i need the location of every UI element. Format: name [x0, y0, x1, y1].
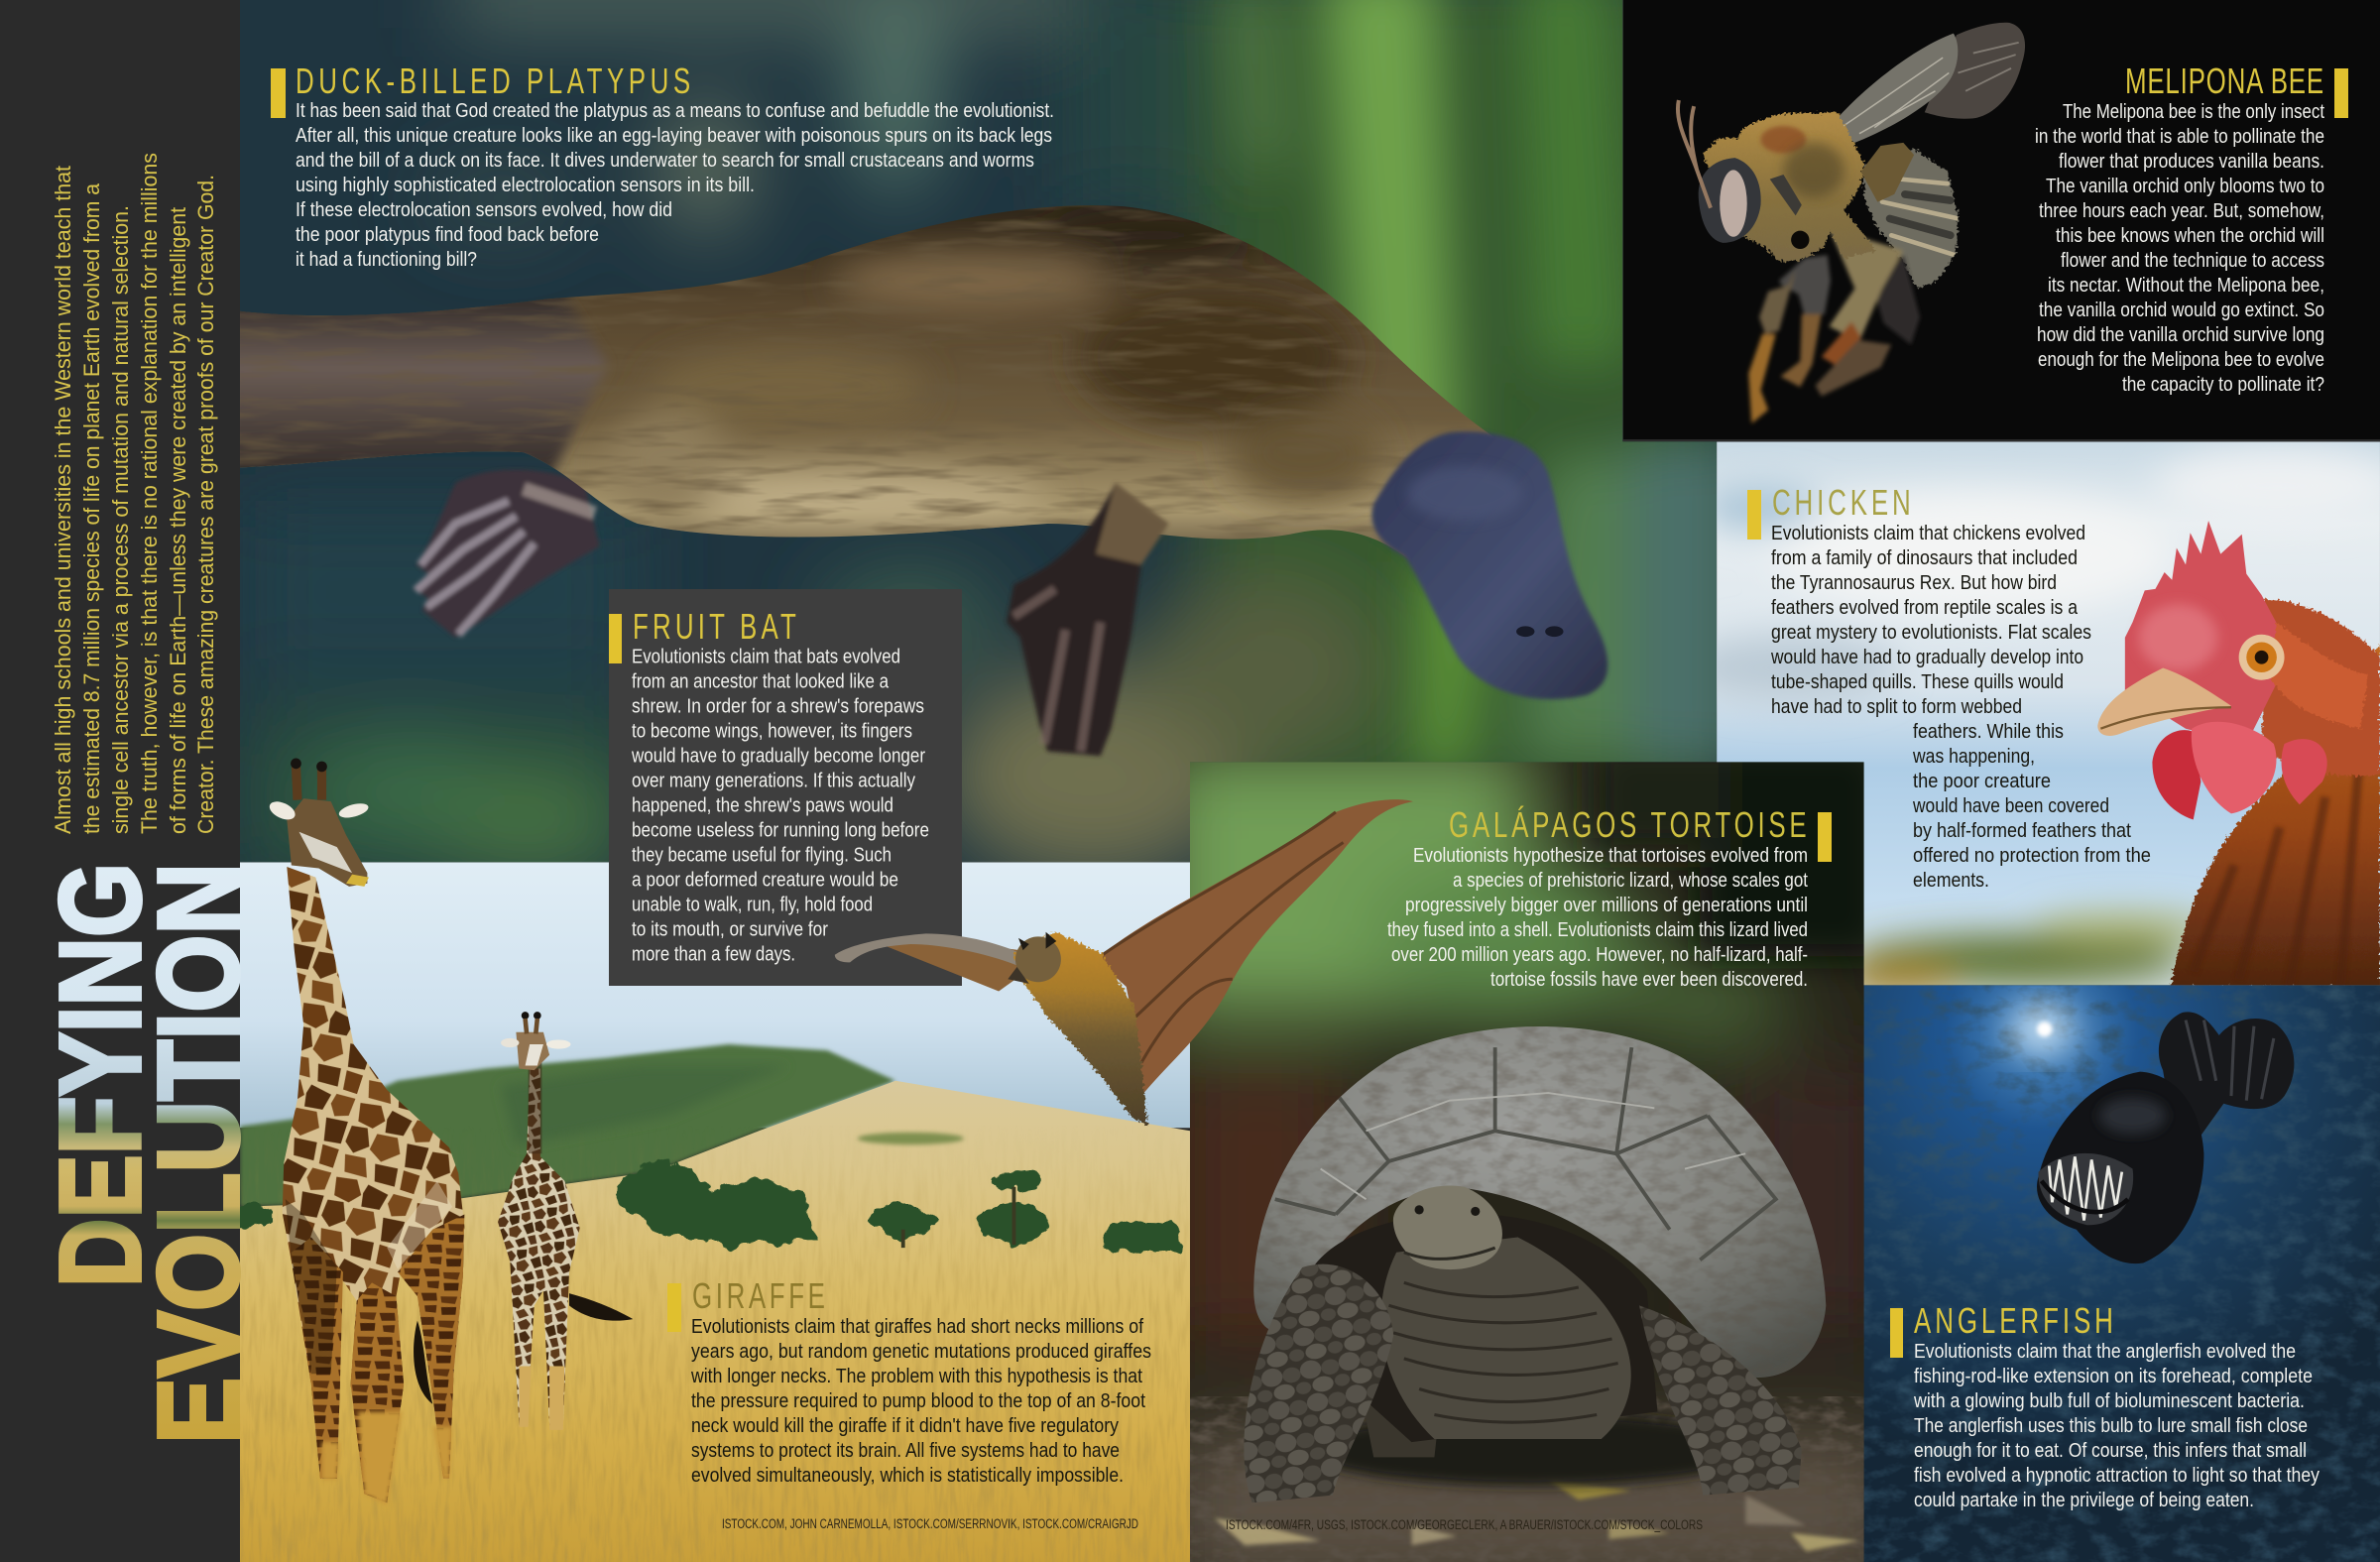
panel: anglerfish: [1864, 985, 2380, 1562]
text: fruit bat description: unable to walk, run, fly, hold food: [632, 893, 873, 916]
text: chicken description: feathers evolved from reptile scales is a: [1771, 596, 2079, 619]
heading: galapagos tortoise: [1449, 805, 1832, 862]
text: platypus description: After all, this unique creature looks like an egg-laying beaver with poisonous spurs on its back legs: [296, 124, 1052, 147]
text: fruit bat description: become useless for running long before: [632, 819, 929, 841]
text: sidebar introduction: single cell ancestor via a process of mutation and natural selection.: [108, 205, 133, 834]
heading: fruit bat: FRUIT BAT: [633, 607, 796, 647]
panel: fruit bat: [609, 589, 962, 986]
text: giraffe description: evolved simultaneously, which is statistically impossible.: [691, 1464, 1124, 1487]
text: platypus description: it had a functioning bill?: [296, 248, 477, 271]
text: bee description: the capacity to pollinate it?: [2122, 373, 2324, 396]
text: bee description: The vanilla orchid only blooms two to: [2046, 175, 2324, 197]
text: bee description: its nectar. Without the Melipona bee,: [2048, 274, 2324, 297]
text: chicken description: elements.: [1913, 869, 1989, 892]
front foot: [1007, 483, 1169, 756]
panel: giraffe: [209, 759, 1190, 1562]
panel: duck-billed platypus: [228, 0, 1738, 881]
text: tortoise description: a species of prehistoric lizard, whose scales got: [1453, 869, 1808, 892]
text: tortoise description: tortoise fossils have ever been discovered.: [1490, 968, 1808, 991]
bee legs: [1748, 228, 1920, 423]
text: bee description: flower and the technique to access: [2061, 249, 2324, 272]
deep sea background: [1864, 985, 2380, 1562]
text: tortoise description: Evolutionists hypothesize that tortoises evolved from: [1413, 844, 1808, 867]
text: giraffe description: years ago, but random genetic mutations produced giraffes: [691, 1340, 1151, 1363]
text: anglerfish description: fishing-rod-like extension on its forehead, complete: [1914, 1365, 2313, 1387]
heading: chicken: [1747, 483, 1911, 540]
heading: galapagos tortoise: GALÁPAGOS TORTOISE: [1449, 805, 1807, 845]
panel: chicken: [1685, 441, 2380, 995]
text: fruit bat description: over many generations. If this actually: [632, 770, 916, 791]
text: chicken description: the poor creature: [1913, 770, 2051, 792]
platypus photo background: [240, 0, 1738, 881]
photo credit: right: ISTOCK.COM/4FR, USGS, ISTOCK.COM/GEORGECLERK, A BRAUER/ISTOCK.COM/STOCK_COLORS: [1226, 1517, 1703, 1532]
text: sidebar introduction: Creator. These amazing creatures are great proofs of our Creator God.: [193, 175, 218, 834]
icon: tortoise: [1244, 1018, 1837, 1502]
text: platypus description: and the bill of a duck on its face. It dives underwater to search for small crustaceans and worms: [296, 149, 1034, 172]
bill: [1371, 431, 1607, 699]
text: anglerfish description: with a glowing bulb full of bioluminescent bacteria.: [1913, 1389, 2305, 1412]
text: bee description: how did the vanilla orchid survive long: [2037, 323, 2324, 346]
text: chicken description: from a family of dinosaurs that included: [1771, 546, 2078, 569]
icon: fruit bat animal: [835, 799, 1413, 1127]
text: sidebar introduction: the estimated 8.7 million species of life on planet Earth evolved from a: [79, 183, 104, 834]
bee abdomen: [1864, 149, 1958, 289]
bee head: [1699, 158, 1761, 243]
text: chicken description: feathers. While this: [1913, 720, 2064, 743]
text: sidebar introduction: of forms of life on Earth—unless they were created by an intelligent: [166, 206, 190, 834]
icon: rooster head: [2097, 521, 2380, 987]
text: chicken description: have had to split to form webbed: [1771, 695, 2022, 718]
heading: giraffe: GIRAFFE: [692, 1276, 825, 1316]
text: anglerfish description: enough for it to eat. Of course, this infers that small: [1914, 1439, 2307, 1462]
text: chicken description: would have been covered: [1912, 794, 2109, 817]
text: fruit bat description: a poor deformed creature would be: [632, 869, 898, 891]
bee panel background: [1623, 0, 2380, 439]
text: fruit bat description: from an ancestor that looked like a: [632, 670, 889, 692]
text: bee description: in the world that is able to pollinate the: [2035, 125, 2324, 148]
icon: small giraffe: [498, 1012, 633, 1430]
text: sidebar introduction: Almost all high schools and universities in the Western world teach that: [51, 165, 75, 834]
body: [240, 205, 1502, 561]
text: fruit bat description: [631, 645, 929, 966]
savanna photo background: [209, 862, 1190, 1562]
heading: duck-billed platypus: DUCK-BILLED PLATYPUS: [296, 61, 690, 101]
icon: anglerfish: [2037, 1012, 2294, 1263]
text: anglerfish description: Evolutionists claim that the anglerfish evolved the: [1914, 1340, 2296, 1363]
chicken photo background: [1685, 441, 2380, 995]
heading: chicken: CHICKEN: [1772, 483, 1911, 523]
heading: melipona bee: [2125, 61, 2348, 118]
text: tortoise description: progressively bigger over millions of generations until: [1405, 894, 1808, 916]
text: bee description: three hours each year. But, somehow,: [2039, 199, 2324, 222]
heading: giraffe: [667, 1276, 825, 1332]
heading: anglerfish: [1890, 1301, 2113, 1358]
text: fruit bat description: more than a few days.: [632, 942, 795, 966]
text: platypus description: the poor platypus find food back before: [296, 223, 599, 246]
text: anglerfish description: The anglerfish uses this bulb to lure small fish close: [1914, 1414, 2308, 1437]
heading: melipona bee: MELIPONA BEE: [2125, 61, 2323, 101]
text: platypus description: If these electrolocation sensors evolved, how did: [296, 198, 672, 221]
photo credit: left: ISTOCK.COM, JOHN CARNEMOLLA, ISTOCK.COM/SERRNOVIK, ISTOCK.COM/CRAIGRJD: [722, 1516, 1138, 1531]
text: chicken description: would have had to gradually develop into: [1770, 646, 2083, 668]
title: Defying Evolution: DEFYING: [36, 863, 165, 1287]
heading: anglerfish: ANGLERFISH: [1914, 1301, 2113, 1341]
panel: galapagos tortoise: [1190, 762, 1864, 1562]
text: chicken description: by half-formed feathers that: [1913, 819, 2131, 842]
text: giraffe description: [690, 1315, 1151, 1487]
text: chicken description: the Tyrannosaurus Rex. But how bird: [1771, 571, 2057, 594]
text: chicken description: Evolutionists claim that chickens evolved: [1771, 522, 2085, 544]
heading: fruit bat: [609, 607, 796, 663]
text: sidebar introduction: [51, 153, 218, 834]
text: chicken description: was happening,: [1912, 745, 2035, 768]
text: fruit bat description: shrew. In order for a shrew's forepaws: [632, 694, 924, 718]
icon: large giraffe: [267, 759, 464, 1505]
text: chicken description: great mystery to evolutionists. Flat scales: [1771, 621, 2091, 644]
text: bee description: flower that produces vanilla beans.: [2059, 150, 2324, 173]
title: Defying Evolution: [36, 863, 263, 1444]
back foot: [413, 469, 600, 638]
text: bee description: [2035, 100, 2324, 396]
title: Defying Evolution: EVOLUTION: [134, 863, 263, 1444]
text: anglerfish description: could partake in the privilege of being eaten.: [1914, 1489, 2254, 1511]
text: bee description: The Melipona bee is the only insect: [2063, 100, 2324, 123]
text: tortoise description: over 200 million years ago. However, no half-lizard, half-: [1391, 943, 1808, 966]
text: tortoise description: they fused into a shell. Evolutionists claim this lizard lived: [1387, 918, 1808, 941]
text: tortoise description: [1387, 844, 1808, 991]
platypus animal: [228, 197, 1607, 756]
text: platypus description: [296, 99, 1054, 271]
text: giraffe description: Evolutionists claim that giraffes had short necks millions of: [691, 1315, 1143, 1338]
tortoise photo background: [1190, 762, 1864, 1562]
bee thorax: [1703, 112, 1876, 261]
text: giraffe description: systems to protect its brain. All five systems had to have: [691, 1439, 1120, 1462]
text: fruit bat description: would have to gradually become longer: [631, 744, 925, 768]
text: giraffe description: with longer necks. The problem with this hypothesis is that: [690, 1365, 1142, 1387]
text: platypus description: It has been said that God created the platypus as a means to confuse and befuddle the evolutionist.: [296, 99, 1054, 122]
text: chicken description: [1770, 522, 2151, 892]
text: fruit bat description: happened, the shrew's paws would: [632, 793, 893, 817]
fruit bat text box: [609, 589, 962, 986]
text: anglerfish description: fish evolved a hypnotic attraction to light so that they: [1914, 1464, 2320, 1487]
text: bee description: the vanilla orchid would go extinct. So: [2039, 299, 2324, 321]
text: bee description: enough for the Melipona bee to evolve: [2038, 348, 2324, 371]
text: chicken description: offered no protection from the: [1913, 844, 2151, 867]
icon: bee illustration: [1678, 23, 2025, 423]
left sidebar: [0, 0, 240, 1562]
text: giraffe description: the pressure required to pump blood to the top of an 8-foot: [691, 1389, 1145, 1412]
panel: melipona bee: [1623, 0, 2380, 439]
text: bee description: this bee knows when the orchid will: [2056, 224, 2324, 247]
text: platypus description: using highly sophisticated electrolocation sensors in its bill.: [296, 174, 755, 196]
text: fruit bat description: Evolutionists claim that bats evolved: [632, 645, 900, 668]
text: anglerfish description: [1913, 1340, 2320, 1511]
text: chicken description: tube-shaped quills. These quills would: [1771, 670, 2064, 693]
text: sidebar introduction: The truth, however, is that there is no rational explanation for the millions: [137, 153, 162, 834]
heading: duck-billed platypus: [271, 61, 690, 118]
text: fruit bat description: to become wings, however, its fingers: [632, 720, 912, 742]
text: fruit bat description: they became useful for flying. Such: [632, 843, 892, 867]
text: giraffe description: neck would kill the giraffe if it didn't have five regulatory: [691, 1414, 1120, 1437]
text: fruit bat description: to its mouth, or survive for: [632, 918, 828, 940]
